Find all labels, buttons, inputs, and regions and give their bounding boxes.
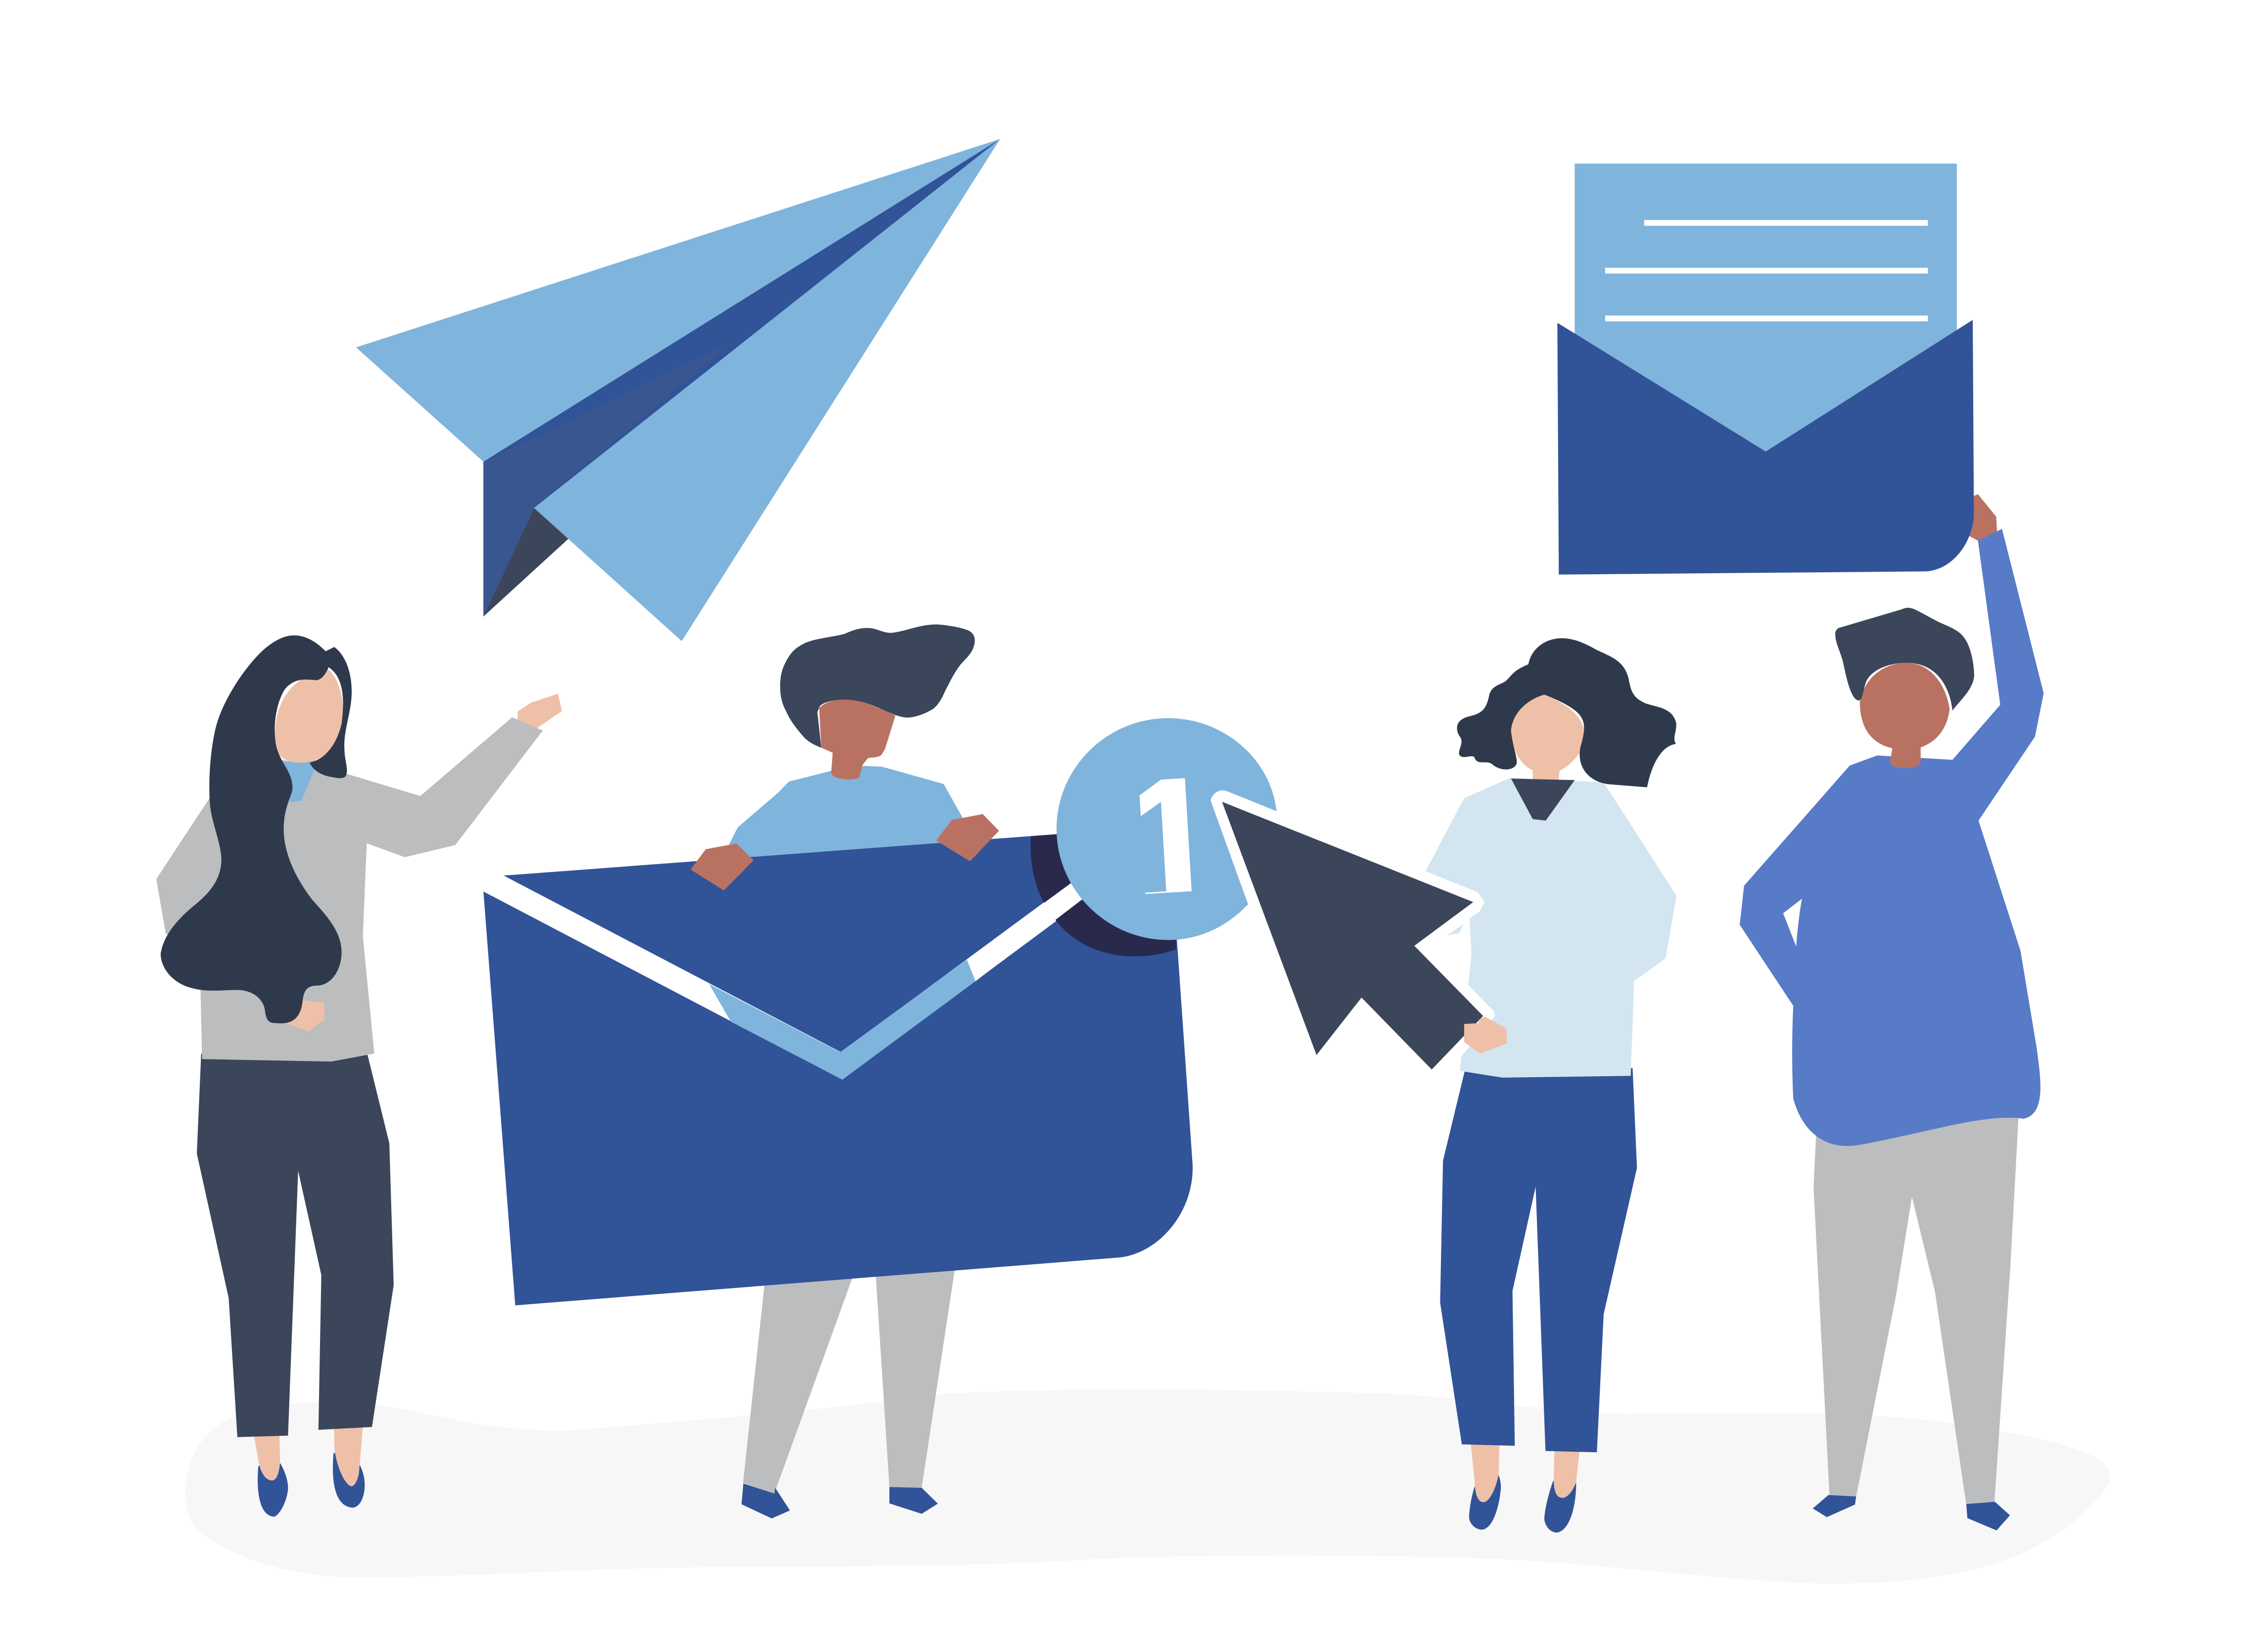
letter line 1 — [1644, 220, 1928, 226]
envelope fold light stripe — [709, 960, 975, 1080]
person 3 left ankle — [1471, 1441, 1499, 1502]
person 1 hand on hip — [287, 999, 324, 1032]
person 4 right shoe — [1966, 1502, 2010, 1530]
person 1 raised hand — [517, 693, 562, 728]
person 4 with raised arm — [1740, 494, 2043, 1530]
person 1 right ankle — [334, 1425, 363, 1486]
letter line 3 — [1605, 316, 1928, 321]
person 4 left shoe — [1813, 1495, 1856, 1517]
badge circle — [1057, 718, 1277, 940]
person 1 with long hair — [156, 636, 562, 1516]
ground blob — [185, 1389, 2110, 1584]
person 3 neck — [1533, 755, 1560, 781]
person 2 legs — [743, 1266, 955, 1494]
person 1 left shoe — [258, 1463, 288, 1516]
person 4 raised hand — [1965, 494, 1997, 541]
person 3 collar — [1511, 779, 1574, 821]
cursor fill — [1222, 802, 1483, 1069]
main envelope — [483, 814, 1193, 1305]
person 1 right shoe — [333, 1453, 365, 1508]
envelope flap — [504, 833, 1078, 1052]
plane keel — [483, 508, 569, 617]
person 3 with curly hair — [1426, 638, 1676, 1533]
person 3 left shoe — [1469, 1474, 1501, 1530]
person 3 face — [1511, 695, 1586, 774]
person 1 hair — [161, 636, 352, 1023]
person 4 neck — [1890, 738, 1921, 768]
person 2 right shoe — [889, 1487, 938, 1514]
person 3 right shoe — [1544, 1481, 1576, 1533]
person 3 hand — [1464, 1016, 1507, 1054]
person 4 legs — [1813, 1107, 2019, 1505]
paper plane — [356, 139, 1000, 641]
envelope body — [1557, 320, 1974, 575]
person 3 right ankle — [1554, 1447, 1580, 1498]
person 1 sweater — [156, 717, 543, 1061]
person 1 face — [275, 669, 343, 763]
person 2 right hand — [936, 814, 999, 861]
letter sheet — [1574, 164, 1957, 463]
person 1 trousers — [197, 1049, 394, 1437]
plane shaded fold — [483, 343, 731, 617]
person 2 shirt — [730, 766, 967, 869]
person 3 hair — [1457, 638, 1676, 787]
plane left wing — [356, 139, 1000, 461]
person 4 head — [1860, 663, 1949, 750]
badge number: 1 — [1112, 734, 1231, 954]
plane fold — [483, 139, 1000, 617]
person 2 face and neck — [819, 700, 895, 779]
person 3 trousers — [1440, 1068, 1637, 1452]
person 2 hair — [780, 625, 975, 748]
person 3 blouse sliver — [1447, 924, 1464, 935]
person 3 blouse — [1426, 778, 1676, 1078]
person 4 sweater — [1740, 529, 2043, 1146]
cursor arrow — [1222, 802, 1483, 1069]
person 1 left ankle — [253, 1433, 280, 1480]
letter line 2 — [1605, 268, 1928, 274]
notification badge shadow — [1030, 830, 1176, 957]
person 4 hair — [1835, 608, 1974, 711]
person 1 collar — [279, 760, 319, 802]
notification badge — [1057, 718, 1277, 954]
envelope white stripe over shadow — [967, 878, 1100, 981]
person 2 left shoe — [741, 1483, 790, 1518]
envelope body — [483, 889, 1193, 1305]
illustration — [156, 139, 2044, 1533]
plane right wing — [534, 139, 1000, 641]
open envelope with letter — [1557, 164, 1974, 575]
person 2 left hand — [691, 843, 754, 890]
person 2 holding envelope — [483, 625, 1193, 1518]
